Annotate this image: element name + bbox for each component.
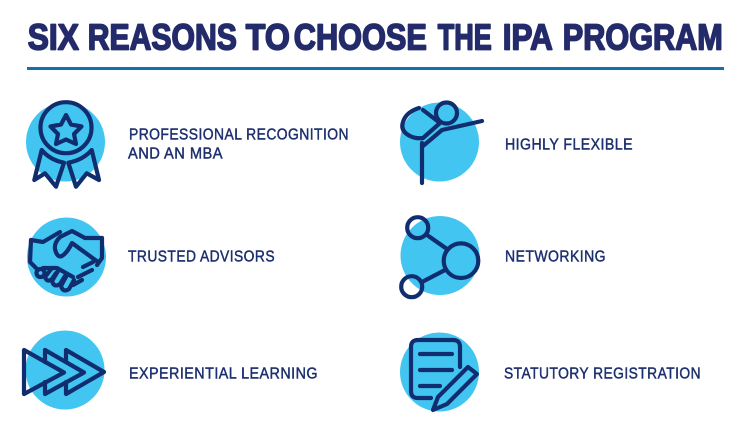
title: CHOOSE — [294, 16, 427, 58]
item: trusted advisors — [27, 218, 275, 296]
item: statutory registration — [400, 332, 701, 412]
label: EXPERIENTIAL LEARNING — [129, 366, 318, 382]
title: SIX — [28, 16, 79, 58]
icon: medal with ribbons — [26, 102, 105, 187]
label: PROFESSIONAL RECOGNITION — [129, 126, 349, 144]
item: highly flexible — [400, 102, 633, 183]
title — [28, 16, 723, 58]
title: THE — [438, 16, 492, 58]
label: HIGHLY FLEXIBLE — [505, 136, 633, 154]
icon: connected nodes — [400, 216, 480, 297]
title: IPA — [503, 16, 553, 58]
title: PROGRAM — [563, 16, 723, 58]
icon: flexible figure — [400, 102, 482, 183]
title: TO — [246, 16, 290, 58]
icon: document and pencil — [400, 332, 479, 412]
icon: fast-forward arrows — [24, 330, 104, 410]
label: STATUTORY REGISTRATION — [504, 366, 701, 382]
label: TRUSTED ADVISORS — [128, 248, 275, 266]
icon: handshake — [27, 218, 106, 296]
label: AND AN MBA — [128, 146, 223, 162]
item: networking — [400, 216, 606, 297]
label: NETWORKING — [505, 248, 606, 266]
item: professional recognition — [26, 102, 349, 187]
title: REASONS — [88, 16, 237, 58]
item: experiential learning — [24, 330, 318, 410]
label — [128, 126, 349, 162]
